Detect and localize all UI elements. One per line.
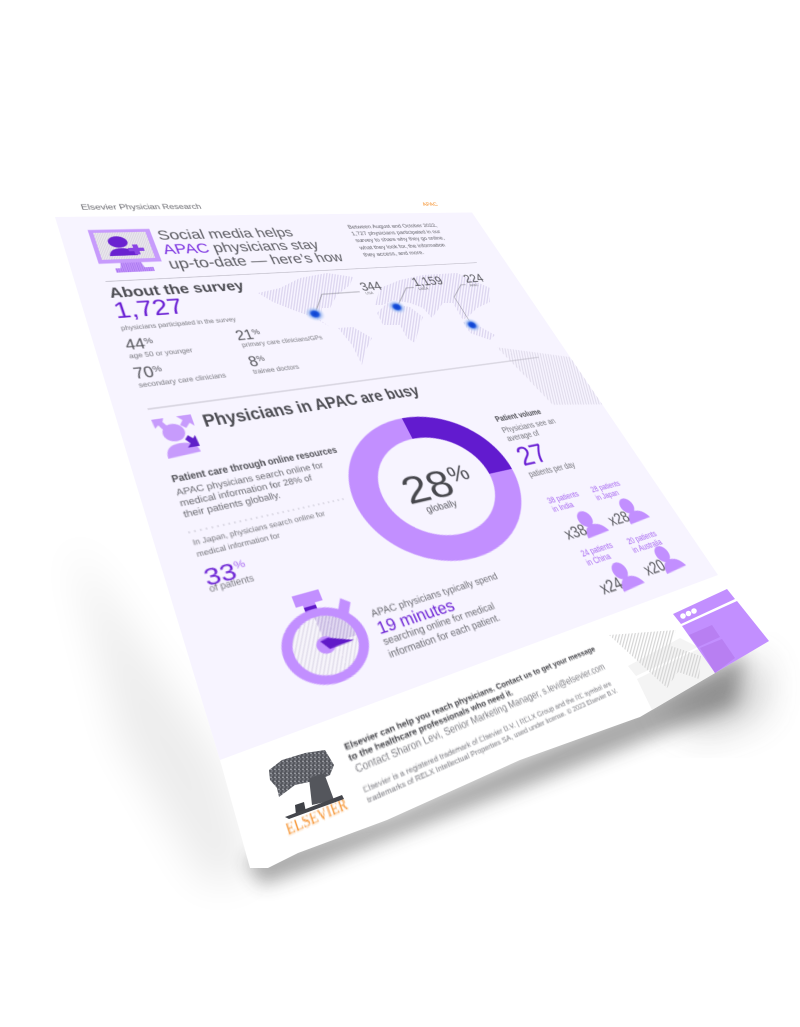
icon: stopwatch (264, 582, 381, 697)
label primary care: primary care clinicians/GPs (240, 334, 324, 349)
remaining lines: searching online for medical (381, 601, 496, 647)
text: patient care heading: Patient care through online resources (170, 446, 339, 485)
label: China: 24 patients (579, 540, 615, 560)
text: patients per day: patients per day (527, 461, 577, 480)
map markers (302, 295, 484, 348)
line one: APAC physicians typically spend (369, 572, 500, 620)
icon: person with arrows (151, 414, 205, 459)
map label USA (357, 280, 384, 296)
text: patient volume body (500, 417, 558, 443)
text: stopwatch statement (369, 572, 502, 660)
map label APAC (461, 272, 487, 288)
text: patient volume body: average of (505, 429, 541, 443)
title: up-to-date — here’s how (166, 250, 346, 272)
world map (258, 273, 495, 365)
hatched triangle decoration (497, 340, 602, 416)
intro paragraph (346, 222, 446, 258)
value 1,727: 1,727 (110, 295, 187, 324)
stat: 70 percent (131, 364, 227, 389)
text: patient care body: medical information for 28% of (178, 473, 314, 509)
text: Japan body: medical information for (195, 531, 281, 559)
value 21: 21% (233, 327, 262, 343)
header: Elsevier Physician Research: Elsevier Physician Research (80, 204, 203, 212)
multiplier x38: x38 (561, 522, 591, 544)
region USA: USA (365, 291, 375, 296)
header: APAC tag: APAC (421, 202, 439, 207)
intro paragraph: survey to share why they go online, (354, 235, 446, 244)
remaining lines: information for each patient. (387, 612, 502, 660)
text: patient care body: APAC physicians search online for (175, 461, 325, 498)
label: Australia: in Australia (630, 537, 664, 555)
text: patient care body: their patients globally. (182, 490, 282, 520)
donut caption globally: globally (424, 499, 459, 515)
label secondary care: secondary care clinicians (137, 371, 227, 389)
multiplier x28: x28 (605, 509, 633, 530)
value 44: 44% (123, 336, 154, 353)
title (155, 226, 346, 272)
stat: 1,727 physicians (110, 295, 237, 332)
hatched grey triangles (609, 630, 701, 688)
text: Japan body: In Japan, physicians search online for (191, 509, 326, 547)
icon: patient Australia (651, 542, 687, 574)
flat page in perspective (80, 202, 686, 839)
logo: ELSEVIER wordmark: ELSEVIER (283, 794, 350, 839)
label: Japan (589, 479, 622, 503)
multiplier x20: x20 (640, 557, 669, 580)
icon: monitor with physician (88, 229, 165, 273)
label: China: in China (584, 551, 613, 568)
intro paragraph: Between August and October 2022, (346, 222, 438, 230)
footer: contact: Contact Sharon Levi, Senior Marketing Manager, s.levi@elsevier.com (353, 661, 606, 774)
footer: legal: trademarks of RELX Intellectual Properties SA, used under license. © 2023 Elsevier B.V. (365, 685, 619, 804)
light grey bands (628, 638, 715, 710)
icon: patient China (608, 558, 646, 592)
value 344: 344 (357, 280, 384, 293)
multiplier x24: x24 (596, 574, 627, 599)
heading: About the survey: About the survey (107, 279, 247, 302)
label: China (579, 540, 615, 568)
logo: Elsevier tree (269, 750, 344, 819)
stat: 44 percent (123, 336, 194, 360)
stat: 21 percent (233, 327, 324, 349)
region EMEA: EMEA (418, 287, 430, 291)
text: patient care body (175, 461, 325, 520)
stat: 8 percent (246, 354, 300, 376)
percent sign: % (443, 461, 474, 487)
stat: 33 percent: 33% (200, 558, 247, 591)
heading: Physicians in APAC are busy: Physicians in APAC are busy (200, 383, 423, 431)
value 70: 70% (131, 364, 163, 382)
region APAC: APAC (469, 284, 480, 288)
map leader lines (306, 284, 490, 339)
footer: legal: Elsevier is a registered trademark of Elsevier B.V. | RELX Group and the RE symbol are (361, 679, 613, 794)
page graphics (88, 228, 686, 686)
value 224: 224 (461, 272, 487, 286)
section dividers (105, 263, 596, 533)
label: India: 38 patients (545, 489, 581, 506)
text: patient volume heading: Patient volume (494, 408, 543, 424)
label trainee: trainee doctors (251, 363, 300, 376)
chart: donut 28 percent (322, 406, 551, 582)
value 1,159: 1,159 (409, 275, 446, 289)
donut value 28 percent (394, 461, 474, 513)
intro paragraph: 1,727 physicians participated in our (350, 228, 442, 237)
text: of patients: of patients (208, 573, 255, 594)
label participants: physicians participated in the survey (120, 316, 237, 332)
map label EMEA (409, 275, 446, 291)
title: APAC physicians stay (160, 238, 321, 257)
label age: age 50 or younger (128, 346, 194, 360)
label: Australia (625, 529, 664, 555)
label: Japan: in Japan (593, 488, 621, 503)
title: Social media helps (155, 226, 296, 243)
label: Japan: 28 patients (589, 479, 622, 495)
intro paragraph: they access, and more. (361, 249, 425, 258)
intro paragraph: what they look for, the information (358, 241, 446, 251)
icon: patient Japan (616, 495, 651, 524)
text: patient volume body: Physicians see an (500, 417, 558, 435)
panel: lavender background (55, 212, 718, 760)
stat: 27 patients: 27 (510, 438, 553, 472)
icon: patient India (573, 507, 610, 538)
label: India: in India (550, 500, 576, 514)
value 28: 28 (394, 462, 461, 513)
label: Australia: 20 patients (625, 529, 659, 547)
footer: call to action: to the healthcare professionals who need it. (347, 687, 515, 763)
label: India (545, 489, 581, 514)
value 19 minutes: 19 minutes (373, 596, 458, 638)
icon: browser window (673, 589, 769, 673)
value 8: 8% (246, 354, 266, 370)
footer: call to action: Elsevier can help you reach physicians. Contact us to get your message (342, 644, 597, 752)
